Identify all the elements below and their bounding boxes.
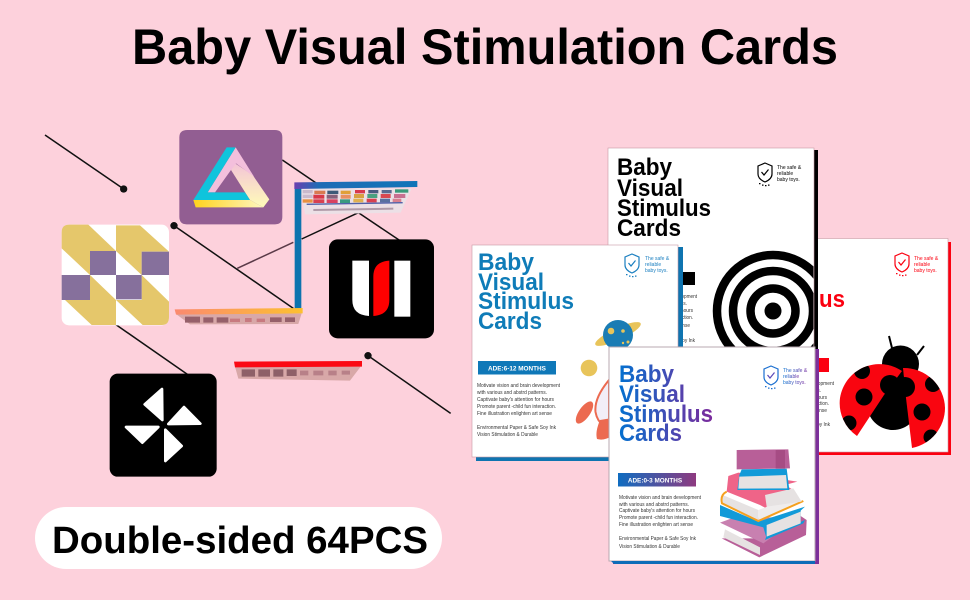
black card description: Environmental Paper & Safe Soy Ink <box>617 338 695 344</box>
red card description <box>751 381 835 428</box>
card: red edge stack <box>234 361 362 381</box>
planet and rocket illustration <box>573 318 643 440</box>
blue card title: Stimulus <box>478 288 574 315</box>
product card: blue space <box>472 245 683 461</box>
card: yellow and purple tile pattern <box>62 225 169 325</box>
purple card safety badge: The safe & <box>783 368 808 374</box>
black card title: Stimulus <box>617 195 711 222</box>
red card description: Motivate vision and brain development <box>751 381 835 387</box>
red card age badge <box>751 358 829 372</box>
blue card description: Captivate baby's attention for hours <box>477 397 554 403</box>
title: Baby Visual Stimulation Cards <box>132 19 838 75</box>
black card title: Visual <box>617 175 683 202</box>
purple card safety badge: reliable <box>783 374 799 380</box>
blue card title: Baby <box>478 249 535 276</box>
black card description: with various and abstrd patterns. <box>617 301 687 307</box>
purple card title: Cards <box>619 420 682 447</box>
purple card description <box>619 495 702 550</box>
blue card age badge <box>478 361 556 374</box>
blue card description <box>477 383 561 438</box>
purple card title <box>619 361 713 447</box>
blue card description: Vision Stimulation & Durable <box>477 432 538 438</box>
exploded card diagram <box>45 130 451 477</box>
black card description: Motivate vision and brain development <box>617 294 698 300</box>
card: black UI shapes <box>329 239 434 338</box>
black card description <box>617 294 698 344</box>
card: blue edge stack <box>294 181 417 309</box>
purple card description: Environmental Paper & Safe Soy Ink <box>619 536 696 542</box>
ladybug illustration <box>840 336 945 448</box>
black card title: Baby <box>617 154 673 181</box>
purple card age badge <box>618 473 696 486</box>
purple card description: Captivate baby's attention for hours <box>619 508 695 514</box>
purple card safety badge <box>764 366 808 389</box>
blue card title <box>478 249 574 335</box>
blue card safety badge: The safe & <box>645 256 670 262</box>
card: orange edge stack <box>175 308 303 324</box>
blue card age badge: ADE:6-12 MONTHS <box>488 366 547 372</box>
purple card title: Stimulus <box>619 401 713 428</box>
purple card description: Promote parent -child fun interaction. <box>619 515 698 521</box>
black card title <box>617 154 711 242</box>
purple card safety badge: baby toys. <box>783 380 806 386</box>
purple card description: Motivate vision and brain development <box>619 495 702 501</box>
red card description: Promote parent -child fun interaction. <box>751 401 829 407</box>
red card safety badge: The safe & <box>914 256 939 262</box>
black card safety badge: The safe & <box>777 165 802 171</box>
blue card title: Cards <box>478 308 542 335</box>
red card safety badge: baby toys. <box>914 268 937 274</box>
concentric target <box>712 250 814 346</box>
blue card description: Environmental Paper & Safe Soy Ink <box>477 425 556 431</box>
red card description: Captivate baby's attention for hours <box>751 395 827 401</box>
purple card age badge: ADE:0-3 MONTHS <box>628 478 683 484</box>
blue card safety badge <box>625 254 670 277</box>
card: black pinwheel <box>110 374 217 477</box>
red card safety badge <box>895 253 939 276</box>
product card: black target <box>608 148 818 349</box>
red card safety badge: reliable <box>914 262 930 268</box>
red card title: Stimulus <box>751 286 845 313</box>
black card age badge <box>617 272 695 285</box>
blue card safety badge: reliable <box>645 262 661 268</box>
red card description: Environmental Paper & Safe Soy Ink <box>751 422 830 428</box>
product card: purple books <box>609 347 819 564</box>
blue card safety badge: baby toys. <box>645 268 668 274</box>
purple card title: Baby <box>619 361 675 388</box>
purple card description: with various and abstrd patterns. <box>619 502 689 508</box>
black card description: Fine illustration enlighten art sense <box>617 323 690 329</box>
blue card title: Visual <box>478 269 544 296</box>
stack of books illustration <box>720 449 807 557</box>
black card title: Cards <box>617 215 681 242</box>
purple card title: Visual <box>619 381 685 408</box>
black card description: Captivate baby's attention for hours <box>617 308 693 314</box>
pill label <box>35 507 442 569</box>
blue card description: with various and abstrd patterns. <box>477 390 547 396</box>
card: purple impossible triangle <box>179 130 282 224</box>
black card safety badge <box>758 163 802 186</box>
connector lines <box>45 135 451 413</box>
blue card description: Fine illustration enlighten art sense <box>477 411 552 417</box>
pill label: Double-sided 64PCS <box>52 520 428 562</box>
blue card description: Promote parent -child fun interaction. <box>477 404 556 410</box>
blue card description: Motivate vision and brain development <box>477 383 561 389</box>
black card safety badge: reliable <box>777 171 793 177</box>
purple card description: Vision Stimulation & Durable <box>619 544 680 550</box>
red card description: with various and abstrd patterns. <box>751 388 821 394</box>
black card safety badge: baby toys. <box>777 177 800 183</box>
purple card description: Fine illustration enlighten art sense <box>619 522 693 528</box>
red card description: Fine illustration enlighten art sense <box>751 408 827 414</box>
black card description: Promote parent -child fun interaction. <box>617 315 693 321</box>
product card: red ladybug <box>818 238 951 455</box>
